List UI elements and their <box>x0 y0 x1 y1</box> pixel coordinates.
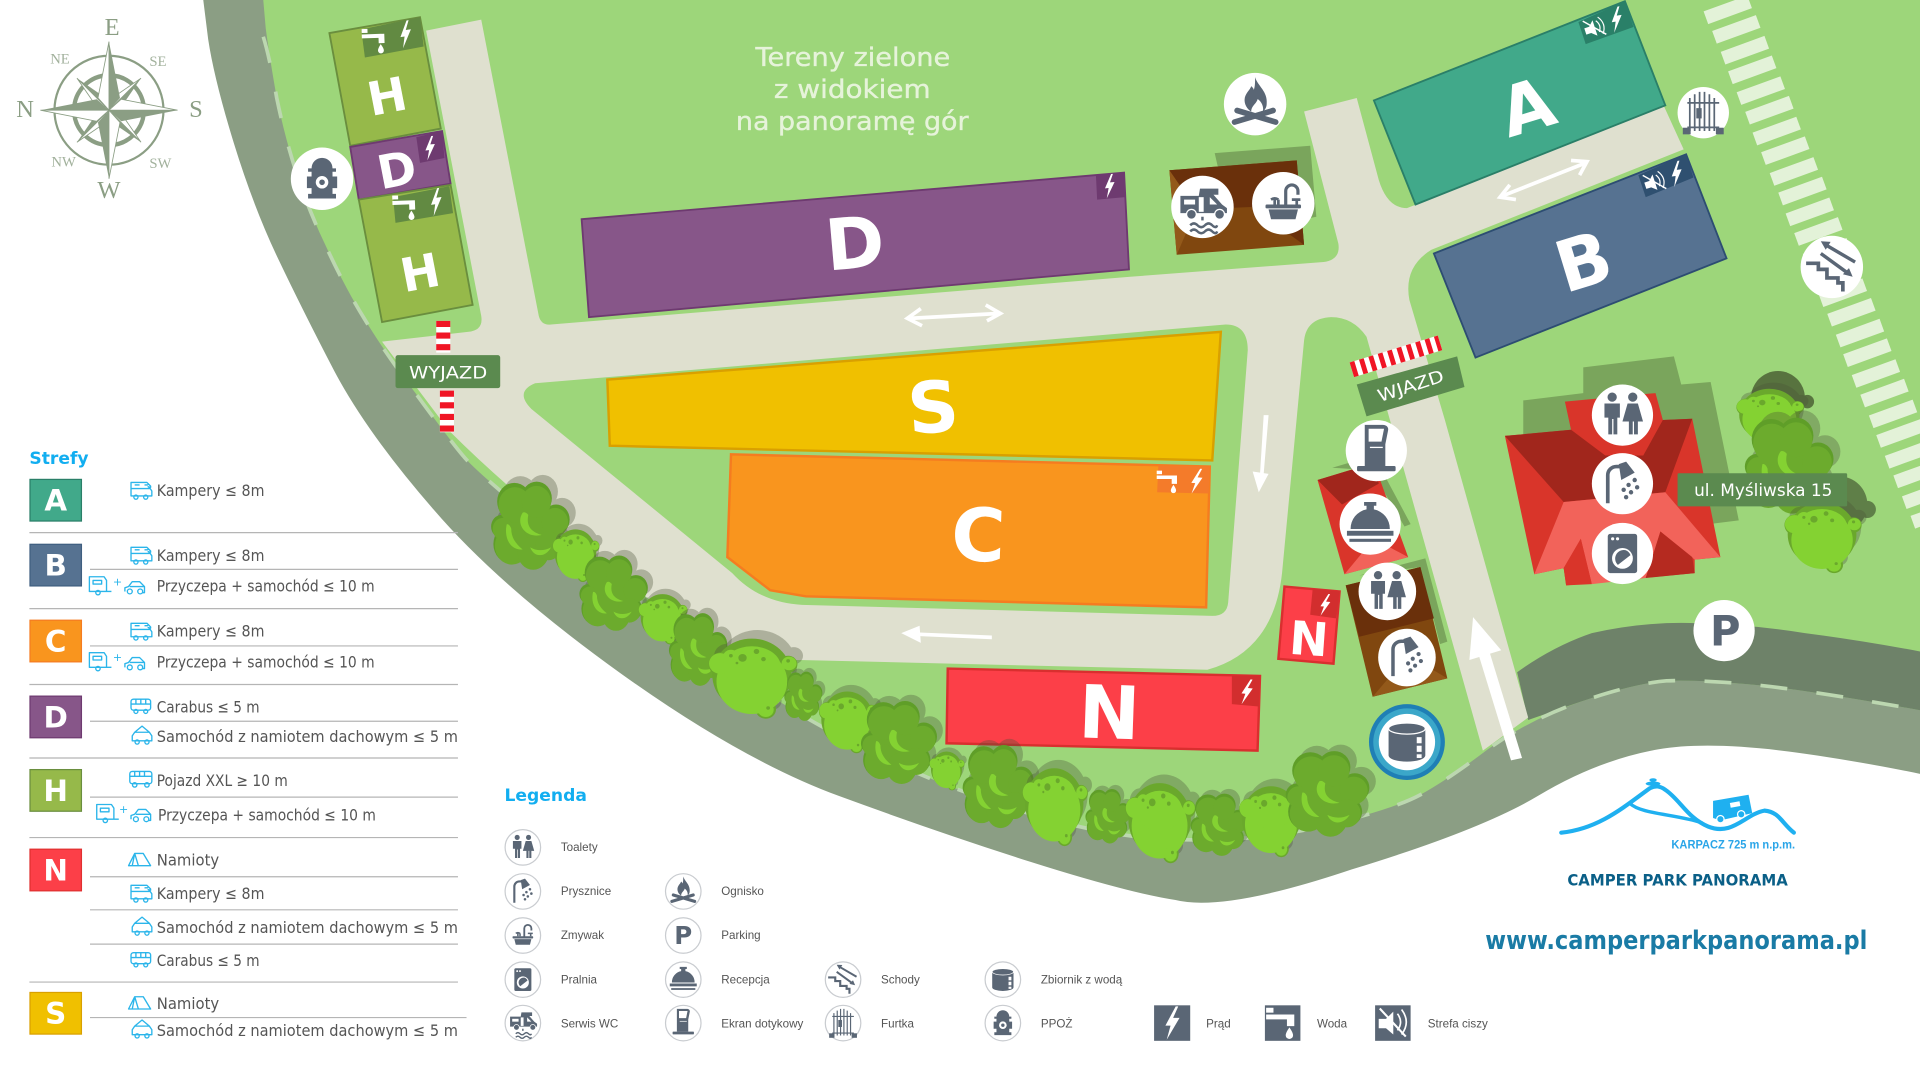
compass labels: NW <box>51 155 76 171</box>
zone key H: Przyczepa + samochód ≤ 10 m <box>158 805 376 824</box>
zone key A: Kampery ≤ 8m <box>157 481 264 500</box>
internal roads <box>382 20 1684 751</box>
compass labels: SW <box>149 156 172 172</box>
legend: electricity <box>1154 1005 1231 1041</box>
zone N large: N <box>1077 670 1142 757</box>
icon: parking <box>1693 600 1755 661</box>
legend: touch screen <box>666 1005 803 1041</box>
zone N large <box>947 669 1260 757</box>
zone key S <box>30 992 458 1040</box>
heading: Strefy: Strefy <box>29 449 89 469</box>
legend: reception: Recepcja <box>721 973 770 986</box>
zone D small: D <box>373 140 421 200</box>
zone key C: C <box>45 624 66 658</box>
legend: WC service <box>505 1005 618 1041</box>
zone key N: N <box>43 853 68 887</box>
zone key C: Kampery ≤ 8m <box>157 622 264 641</box>
icon: toilets small <box>1359 563 1416 620</box>
dark parking road <box>1517 623 1920 720</box>
heading: green areas: z widokiem <box>774 75 931 105</box>
zone key B: Przyczepa + samochód ≤ 10 m <box>157 576 375 595</box>
panel: zones table <box>29 449 467 1040</box>
icon: gate <box>1678 87 1729 138</box>
heading: green areas: Tereny zielone <box>754 43 950 73</box>
zone key D: Samochód z namiotem dachowym ≤ 5 m <box>157 727 458 746</box>
zone key H <box>30 770 376 824</box>
zone B: B <box>1546 214 1622 310</box>
exit sign <box>396 355 500 388</box>
legend: laundry: Pralnia <box>561 973 598 986</box>
icon: camper service <box>1171 176 1234 238</box>
compass labels: S <box>189 96 203 123</box>
zone key S: Namioty <box>157 994 219 1013</box>
legend: water <box>1265 1005 1348 1041</box>
legend: quiet zone: Strefa ciszy <box>1428 1017 1488 1030</box>
zone A <box>1374 1 1665 204</box>
arrow: entrance up <box>1469 617 1522 760</box>
road edge dashes <box>263 37 1920 840</box>
building: service block <box>1169 146 1316 255</box>
zone B <box>1434 154 1727 358</box>
legend: water: Woda <box>1317 1017 1348 1030</box>
zone key S: S <box>45 997 66 1031</box>
street address sign: ul. Myśliwska 15 <box>1694 481 1832 501</box>
icon: toilets <box>1592 384 1653 446</box>
zone S: S <box>905 365 962 451</box>
zone key B: + <box>113 575 122 588</box>
logo: mountain mark <box>1561 778 1794 833</box>
compass <box>16 14 203 204</box>
building: main sanitary <box>1505 356 1739 585</box>
zone key D <box>30 696 458 746</box>
zone D large <box>582 173 1129 317</box>
legend: fire hydrant: PPOŻ <box>1041 1017 1072 1030</box>
zone key C: Przyczepa + samochód ≤ 10 m <box>157 652 375 671</box>
building: reception <box>1318 456 1411 574</box>
zone H bottom: H <box>396 243 444 303</box>
zone N small: N <box>1288 611 1330 667</box>
zone C: C <box>950 493 1007 580</box>
legend: campfire: Ognisko <box>721 885 764 898</box>
zone key N: Namioty <box>157 851 219 870</box>
compass labels: N <box>16 96 34 123</box>
arrow: two-way lower road <box>907 305 1000 326</box>
icon: sink <box>1252 172 1314 234</box>
legend: gate: Furtka <box>881 1017 915 1030</box>
arrow: left <box>901 626 992 643</box>
legend: gate <box>825 1005 915 1041</box>
zone D small <box>350 131 451 200</box>
zone A: A <box>1490 62 1564 154</box>
icon: parking: P <box>1710 606 1741 655</box>
legend: toilets <box>505 830 598 865</box>
icon: shower small <box>1378 629 1436 686</box>
zone key B: B <box>45 549 67 583</box>
zone key N: Samochód z namiotem dachowym ≤ 5 m <box>157 918 458 937</box>
legend: quiet zone <box>1375 1005 1488 1041</box>
zone key C: + <box>113 651 122 664</box>
legend: water tank <box>985 962 1123 997</box>
zone key N <box>30 849 458 970</box>
heading: Legenda: Legenda <box>504 786 587 806</box>
zone key H: H <box>43 774 68 808</box>
zone key D: D <box>44 700 68 734</box>
legend: toilets: Toalety <box>561 841 598 854</box>
zone key H: Pojazd XXL ≥ 10 m <box>157 771 288 790</box>
zone H top <box>329 17 441 146</box>
legend: showers: Prysznice <box>561 885 611 898</box>
zone key A: A <box>44 484 67 518</box>
legend: electricity: Prąd <box>1206 1017 1231 1030</box>
zone C <box>727 454 1210 607</box>
green terrain <box>263 0 1920 840</box>
zone key B: Kampery ≤ 8m <box>157 546 264 565</box>
website url: www.camperparkpanorama.pl <box>1485 926 1867 956</box>
building: toilets and showers <box>1346 558 1447 697</box>
green island <box>524 324 1248 616</box>
icon: shower <box>1592 453 1653 514</box>
compass labels <box>16 14 203 204</box>
legend: reception <box>666 962 770 997</box>
legend: touch screen: Ekran dotykowy <box>721 1017 803 1030</box>
legend: water tank: Zbiornik z wodą <box>1041 973 1123 986</box>
entrance barrier <box>1352 343 1440 370</box>
compass labels: W <box>97 177 121 204</box>
panel: site map <box>203 0 1920 903</box>
zone key C <box>30 620 375 671</box>
heading: green areas: na panoramę gór <box>736 107 969 137</box>
zone key N: Carabus ≤ 5 m <box>157 951 260 970</box>
logo: name: CAMPER PARK PANORAMA <box>1567 870 1788 889</box>
zone key B <box>30 544 375 595</box>
compass labels: NE <box>50 52 70 68</box>
icon: touch screen <box>1346 420 1407 481</box>
legend: sink: Zmywak <box>561 929 604 942</box>
compass ring <box>54 56 163 165</box>
outer road <box>203 0 1920 903</box>
zone S <box>607 332 1221 460</box>
zone D large: D <box>822 200 888 288</box>
legend: parking: Parking <box>721 929 761 942</box>
zone key D: Carabus ≤ 5 m <box>157 698 260 717</box>
heading: green areas <box>736 43 969 137</box>
entrance sign: WJAZD <box>1375 367 1447 407</box>
compass labels: E <box>105 14 120 41</box>
compass star <box>40 42 178 179</box>
legend: sink <box>505 918 604 953</box>
compass labels: SE <box>149 54 167 70</box>
icon: stairs <box>1801 236 1863 298</box>
icon: laundry <box>1592 523 1653 584</box>
legend: campfire <box>666 874 764 909</box>
icon: water tank <box>1369 704 1445 780</box>
zone key H: + <box>119 803 128 816</box>
zone key N: Kampery ≤ 8m <box>157 884 264 903</box>
arrow: two-way upper road <box>1500 160 1587 200</box>
panel: legend <box>504 786 1488 1041</box>
footpath stripes <box>1704 0 1920 529</box>
arrow: down <box>1253 415 1269 492</box>
legend: parking: P <box>674 921 692 950</box>
zone N small <box>1278 587 1340 667</box>
trees near building <box>1736 371 1876 573</box>
icon: campfire <box>1224 73 1286 135</box>
legend: fire hydrant <box>985 1005 1072 1041</box>
zone H top: H <box>363 66 411 127</box>
zone key S: Samochód z namiotem dachowym ≤ 5 m <box>157 1021 458 1040</box>
logo and website <box>1485 778 1867 956</box>
logo: altitude text: KARPACZ 725 m n.p.m. <box>1671 838 1795 852</box>
divider lines <box>29 533 467 1018</box>
icon: reception bell <box>1340 493 1401 555</box>
legend: parking <box>666 918 761 953</box>
entrance sign <box>1357 356 1464 416</box>
legend: stairs: Schody <box>881 973 920 986</box>
zone key A <box>30 479 264 521</box>
legend: laundry <box>505 962 598 997</box>
exit barrier <box>443 321 447 432</box>
legend: WC service: Serwis WC <box>561 1017 618 1030</box>
zone H bottom <box>359 185 473 322</box>
exit sign: WYJAZD <box>409 363 487 383</box>
trees along road <box>491 475 1376 863</box>
legend: showers <box>505 874 611 909</box>
street address sign <box>1678 473 1847 506</box>
icon: hydrant <box>291 148 353 210</box>
legend: stairs <box>825 962 920 997</box>
